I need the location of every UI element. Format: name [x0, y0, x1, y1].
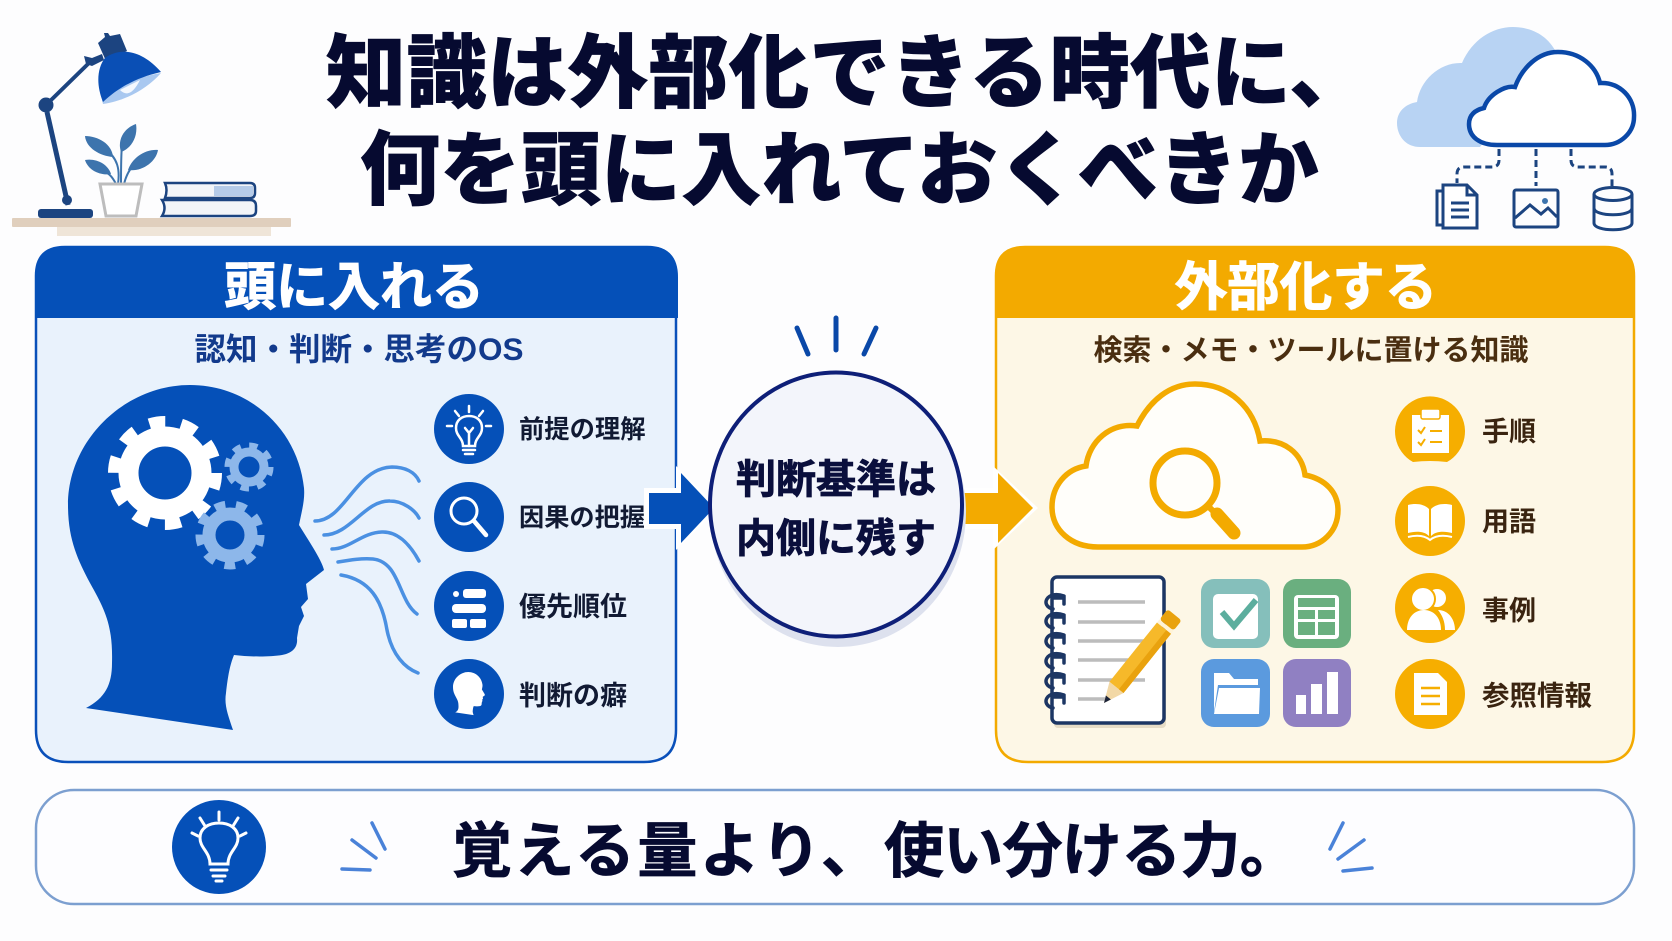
panel heading: 外部化する [1175, 258, 1437, 317]
icon: lightbulb [434, 394, 504, 464]
panel: 頭に入れる [35, 246, 678, 762]
icon: cloud with documents, image and database [1397, 27, 1634, 230]
panel subheading: 検索・メモ・ツールに置ける知識 [1093, 334, 1529, 367]
icon: document [1395, 659, 1465, 729]
icon: notebook and pencil [1046, 577, 1182, 728]
icon: folder tile [1201, 659, 1270, 727]
label: 優先順位 [519, 592, 627, 622]
head silhouette with gears [68, 385, 324, 730]
accent rays left [342, 823, 385, 870]
icon: clipboard [1395, 396, 1465, 462]
icon: checklist tile [1201, 579, 1270, 648]
label: 判断の癖 [519, 681, 627, 711]
icon: desk with lamp, plant and books [12, 33, 291, 236]
icon: open book [1395, 486, 1465, 556]
icon: magnifier [434, 482, 504, 552]
icon: bar chart tile [1283, 659, 1351, 727]
label: 前提の理解 [519, 416, 646, 444]
title: 何を頭に入れておくべきか [360, 126, 1319, 215]
circle: 判断基準は内側に残す: 判断基準は [736, 458, 936, 502]
label: 事例 [1482, 596, 1536, 626]
bottom banner [36, 790, 1634, 904]
icon: table tile [1283, 579, 1351, 648]
label: 手順 [1482, 417, 1536, 447]
circle: 判断基準は内側に残す: 内側に残す [736, 517, 936, 561]
wavy thought lines [315, 467, 419, 673]
panel heading: 頭に入れる [224, 259, 484, 317]
label: 用語 [1482, 507, 1536, 537]
accent rays right [1330, 823, 1372, 871]
label: 因果の把握 [519, 504, 645, 532]
tagline [452, 818, 1299, 885]
arrow: orange from circle [960, 466, 1038, 550]
emphasis rays [797, 318, 876, 354]
icon: people [1395, 573, 1465, 643]
icon: cloud search [1052, 384, 1338, 547]
circle: 判断基準は内側に残す [710, 372, 966, 647]
title [326, 29, 1370, 215]
arrow: blue to circle [644, 466, 720, 550]
label: 参照情報 [1482, 680, 1592, 711]
icon: lightbulb [172, 800, 266, 894]
icon: priority blocks [434, 571, 504, 641]
tagline: 使い分ける力。 [884, 818, 1299, 885]
title: 知識は外部化できる時代に、 [326, 29, 1370, 118]
icon: head [434, 659, 504, 729]
panel: 外部化する [995, 246, 1635, 762]
panel subheading: 認知・判断・思考のOS [194, 331, 524, 367]
tagline: 覚える量より、 [452, 818, 883, 885]
